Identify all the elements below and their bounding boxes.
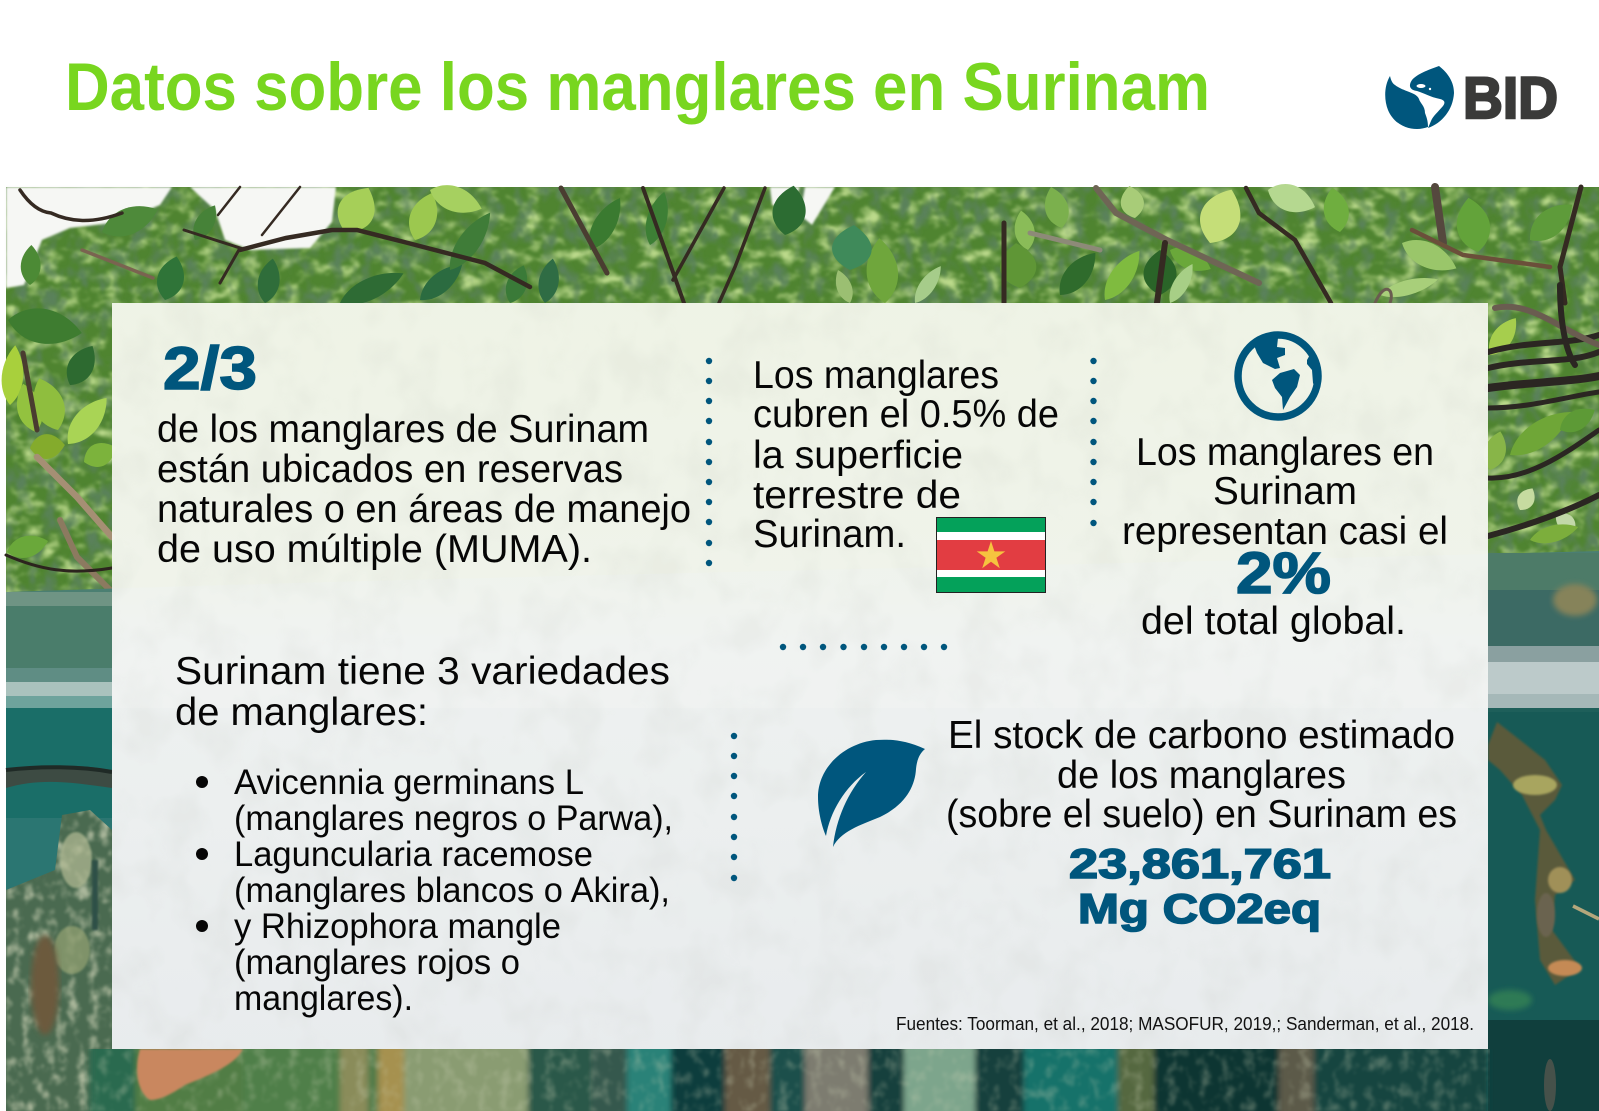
icon: flag of Suriname: [936, 518, 1046, 592]
panel: translucent content card: [112, 303, 1488, 1049]
stat: land cover: Surinam.: [753, 513, 906, 556]
stat: land cover: terrestre de: [753, 474, 961, 517]
canopy leaves: [0, 178, 1599, 562]
list text: (manglares rojos o: [234, 943, 520, 982]
big number carbon: [1069, 840, 1331, 932]
big number 2%: 2%: [1236, 541, 1331, 606]
left strip leaves: [5, 303, 85, 350]
rocks left: [6, 810, 112, 1111]
sources: Fuentes: Toorman, et al., 2018; MASOFUR, 2019,; Sanderman, et al., 2018.: [896, 1014, 1474, 1034]
stat: global share: [1122, 431, 1448, 643]
kelp right: [1488, 722, 1580, 985]
stat: global share: Surinam: [1213, 470, 1357, 513]
title: Datos sobre los manglares en Surinam: [65, 49, 1210, 125]
list text: y Rhizophora mangle: [234, 907, 561, 946]
divider dots 2: [1090, 358, 1097, 526]
paragraph: naturales o en áreas de manejo: [157, 488, 691, 531]
stat: global share: Los manglares en: [1136, 431, 1434, 474]
stat: land cover: cubren el 0.5% de: [753, 393, 1059, 436]
stat: land cover: la superficie: [753, 434, 963, 477]
heading: [175, 650, 670, 734]
underwater: [6, 708, 1599, 1111]
stat: carbon stock: [946, 714, 1457, 932]
big number 2/3: 2/3: [163, 335, 257, 402]
stat: global share: representan casi el: [1122, 510, 1448, 553]
heading: Surinam tiene 3 variedades: [175, 650, 670, 693]
logo wordmark: BID: [1463, 66, 1558, 131]
heading: de manglares:: [175, 691, 428, 734]
submerged branch: [6, 766, 112, 788]
sky gaps in canopy: [6, 187, 835, 288]
divider dots 4: [731, 733, 737, 881]
left strip branches: [6, 353, 112, 590]
paragraph: de uso múltiple (MUMA).: [157, 528, 592, 571]
foliage texture: [6, 187, 1599, 597]
bottom strip: [86, 1049, 1490, 1111]
list text: (manglares negros o Parwa),: [234, 799, 673, 838]
icon: globe: [1238, 335, 1320, 417]
divider dots 3: [780, 644, 947, 650]
stat: land cover: Los manglares: [753, 354, 999, 397]
icon: leaf: [818, 740, 925, 847]
stat: carbon stock: (sobre el suelo) en Surinam es: [946, 793, 1457, 836]
stat: land cover: [753, 354, 1059, 556]
paragraph: de los manglares de Surinam: [157, 408, 649, 451]
list text: [234, 763, 673, 1018]
divider dots 1: [706, 358, 712, 566]
bullets: [196, 776, 208, 932]
list text: (manglares blancos o Akira),: [234, 871, 670, 910]
right strip leaves: [1482, 312, 1524, 361]
mangrove varieties list: [175, 650, 673, 1018]
right strip branches: [1488, 285, 1599, 536]
stat: global share: del total global.: [1141, 600, 1406, 643]
paragraph: [157, 408, 691, 571]
list text: manglares).: [234, 979, 413, 1018]
stat: carbon stock: El stock de carbono estimado: [948, 714, 1455, 757]
water band: [6, 551, 1599, 725]
panel texture: [112, 303, 1488, 1049]
stat: carbon stock: de los manglares: [1057, 754, 1346, 797]
stat: two thirds in reserves: [157, 335, 691, 571]
list text: Avicennia germinans L: [234, 763, 584, 802]
branches: [20, 187, 1581, 303]
big number carbon: 23,861,761: [1069, 840, 1331, 887]
icon: logo globe: [1385, 66, 1454, 129]
big number carbon: Mg CO2eq: [1078, 885, 1321, 932]
paragraph: están ubicados en reservas: [157, 448, 623, 491]
logo: BID: [1385, 66, 1558, 131]
list text: Laguncularia racemose: [234, 835, 593, 874]
